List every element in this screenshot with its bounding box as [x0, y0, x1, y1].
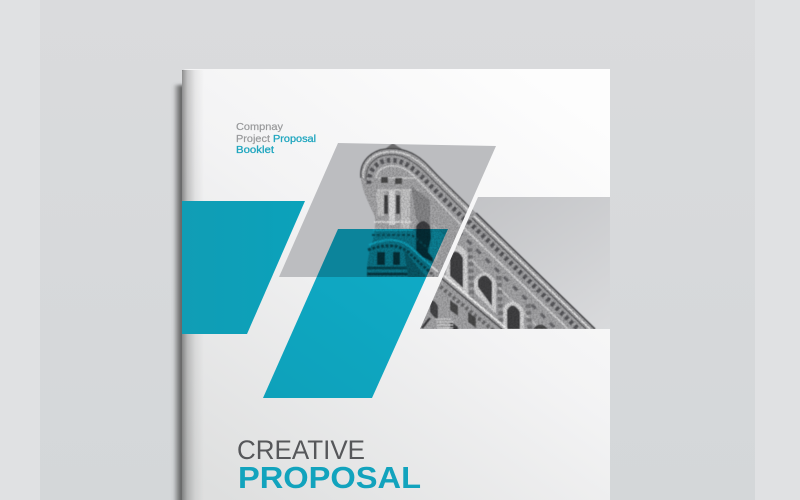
- label line: booklet: Booklet: [236, 144, 274, 156]
- teal central parallelogram: [263, 229, 448, 398]
- grey photo panel: lower right with building: [415, 197, 610, 331]
- booklet cover: [182, 69, 610, 500]
- booklet shadow: [173, 85, 184, 500]
- stone texture lower: [420, 210, 594, 329]
- company label: Compnay: [236, 121, 284, 133]
- stone texture upper: [361, 149, 465, 277]
- booklet mockup scene: [40, 69, 755, 500]
- title: proposal: PROPOSAL: [238, 460, 421, 495]
- label line: project proposal: Project: [236, 133, 270, 145]
- label line: project proposal: Proposal: [273, 133, 316, 145]
- title: creative: CREATIVE: [237, 435, 365, 465]
- teal left parallelogram: [182, 201, 305, 334]
- label line: project proposal: [236, 133, 316, 145]
- grey photo panel: upper with building: [270, 140, 500, 280]
